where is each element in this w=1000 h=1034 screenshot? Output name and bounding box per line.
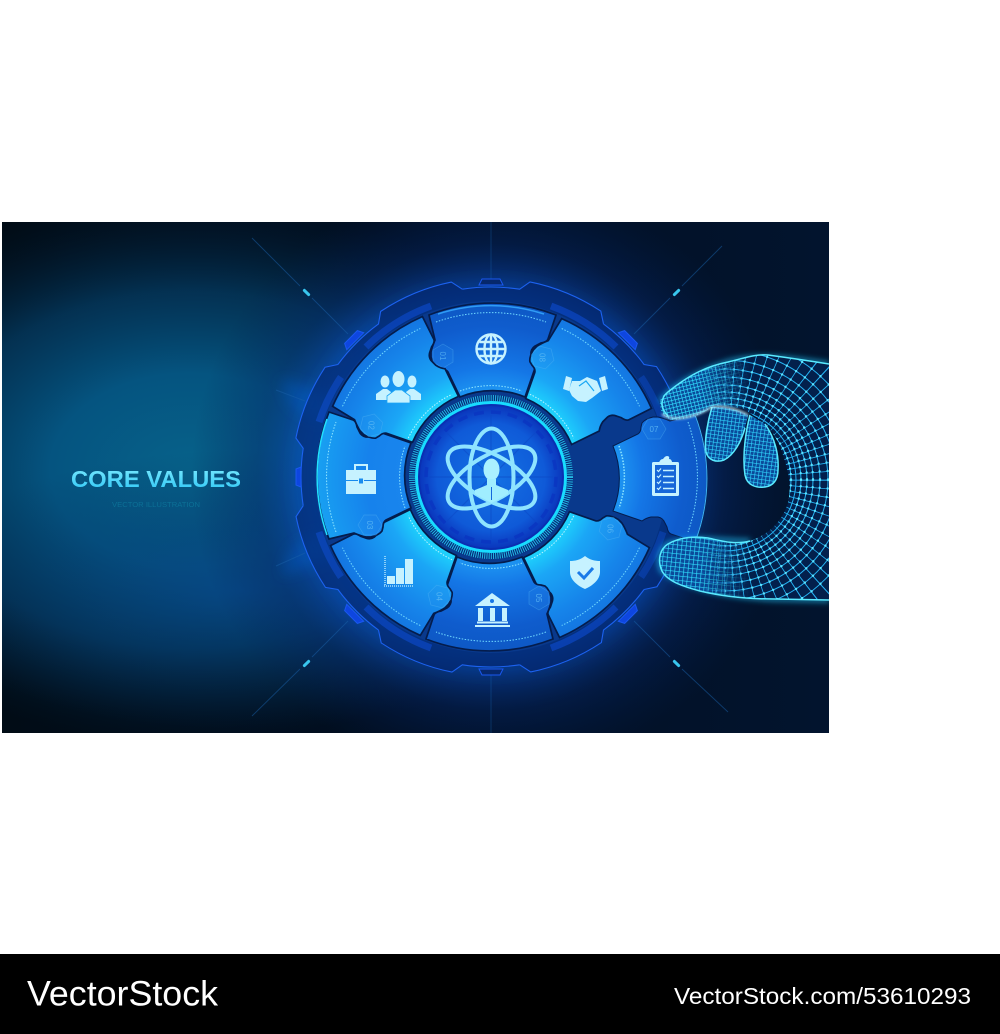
badge 08: 08 (538, 353, 547, 362)
icon: bar chart (384, 556, 414, 586)
icon: briefcase (346, 465, 376, 494)
marker top right (672, 288, 681, 297)
title: core values: CORE VALUES (71, 466, 241, 492)
outer glow (305, 291, 677, 663)
hand glow (660, 358, 829, 600)
badge 04: 04 (434, 592, 443, 601)
HUD diagonal lines and markers (252, 238, 728, 716)
central hub (409, 395, 573, 559)
footer image url: VectorStock.com/53610293 (674, 983, 971, 1009)
segment: briefcase (317, 412, 411, 539)
palm mesh (660, 356, 829, 600)
segment: handshake (504, 310, 660, 466)
icon: shield with check (570, 556, 600, 589)
icon: clipboard checklist (652, 456, 679, 496)
badge 04 (424, 581, 455, 612)
badge 01: 01 (438, 352, 447, 361)
badge 03: 03 (365, 521, 374, 530)
icon: person bust (475, 458, 508, 503)
segment: clipboard pulled out (613, 415, 707, 542)
finger: middle (744, 415, 778, 486)
segment: shield (502, 490, 658, 646)
outer ring highlights (319, 306, 663, 648)
marker top left (302, 288, 311, 297)
segment: globe (429, 303, 556, 397)
badge 02: 02 (366, 421, 375, 430)
outer ring body (273, 259, 709, 695)
marker bottom right (672, 659, 681, 668)
icon: people group (376, 371, 421, 403)
outer ring notched outline (273, 259, 709, 695)
badge 08 (527, 342, 558, 373)
icon: bank building (475, 593, 510, 627)
icon: atom orbits (438, 428, 545, 526)
footer bar (0, 954, 1000, 1034)
hand bright outlines (660, 355, 829, 600)
left glow wedges (280, 378, 316, 576)
icon: globe (476, 334, 506, 364)
badge 07: 07 (650, 425, 659, 434)
subtitle: vector illustration: VECTOR ILLUSTRATION (112, 500, 200, 509)
finger: ring (706, 406, 748, 460)
footer logo text: VectorStock (27, 974, 218, 1014)
segment: people (324, 308, 480, 464)
dark illustration panel (2, 222, 829, 733)
segment: chart (322, 488, 478, 644)
core values wheel (273, 259, 709, 695)
badge 02 (356, 410, 387, 441)
wireframe hand (654, 351, 829, 606)
outer ring tabs (296, 279, 639, 675)
marker bottom left (302, 659, 311, 668)
icon: handshake (563, 376, 608, 402)
badge 06: 06 (606, 524, 615, 534)
badge 05: 05 (534, 594, 543, 603)
badge 06 (595, 513, 626, 544)
inner wheel backing (315, 301, 667, 653)
segment: bank (426, 557, 553, 651)
